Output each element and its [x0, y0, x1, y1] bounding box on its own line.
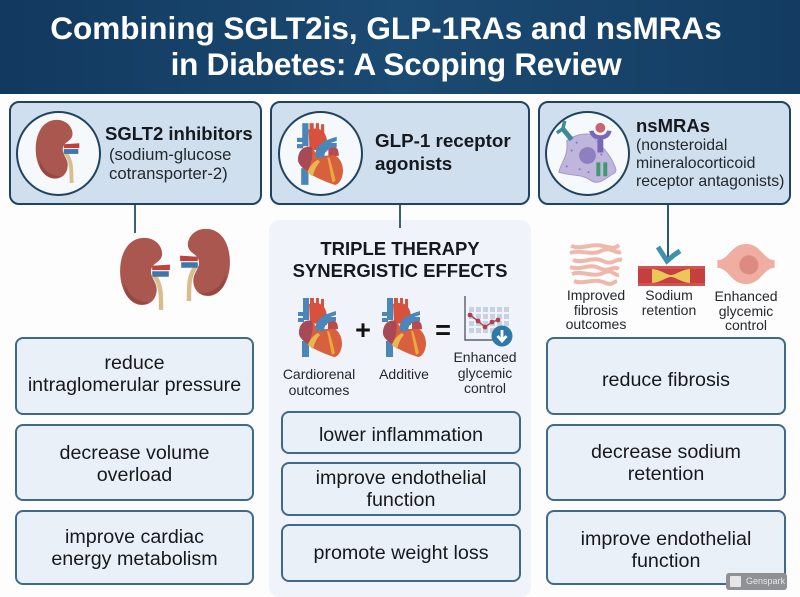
box: improve endothelial function: [546, 510, 786, 585]
icon: cell in circle: [545, 111, 630, 196]
box: decrease volume overload: [15, 424, 254, 501]
title: Combining SGLT2is, GLP-1RAs and nsMRAs: [50, 10, 722, 46]
box: decrease sodium retention: retention: [628, 462, 704, 484]
label: enhanced glycemic control: Enhanced: [714, 288, 778, 304]
label: enhanced glycemic control: control: [464, 380, 506, 396]
equals sign: =: [435, 315, 451, 345]
box: improve endothelial function: improve endothelial: [316, 467, 486, 489]
panel: SGLT2 inhibitors header: [9, 101, 262, 205]
description: nonsteroidal mineralocorticoid receptor antagonists: mineralocorticoid: [636, 155, 755, 172]
label: enhanced glycemic control: glycemic: [458, 364, 512, 380]
icon: heart in circle: [278, 111, 363, 196]
label: sodium retention: [642, 287, 696, 318]
icon: kidney in circle: [16, 111, 101, 196]
heading: GLP-1 receptor agonists: [375, 130, 511, 174]
description: nonsteroidal mineralocorticoid receptor antagonists: (nonsteroidal: [636, 137, 727, 154]
description: nonsteroidal mineralocorticoid receptor antagonists: [636, 137, 784, 190]
watermark: Genspark: [726, 573, 787, 590]
box: improve endothelial function: function: [632, 550, 700, 572]
box: decrease volume overload: overload: [97, 464, 172, 486]
panel: GLP-1 receptor agonists header: [270, 101, 530, 205]
icon: heart additive: [382, 298, 426, 357]
triple therapy heading: [293, 238, 507, 281]
box: decrease sodium retention: decrease sodium: [591, 440, 741, 462]
label: improved fibrosis outcomes: [566, 287, 626, 332]
panel: triple therapy: [269, 220, 531, 597]
box: lower inflammation: lower inflammation: [319, 424, 483, 446]
box: reduce intraglomerular pressure: reduce: [104, 352, 165, 374]
box: improve cardiac energy metabolism: improve cardiac: [65, 526, 204, 548]
label: cardiorenal outcomes: [283, 366, 355, 398]
heading: SGLT2 inhibitors: SGLT2 inhibitors: [105, 123, 253, 144]
box: reduce intraglomerular pressure: [15, 337, 254, 415]
title: [0, 0, 800, 94]
connector: GLP-1 to triple therapy: [399, 205, 401, 228]
box: improve endothelial function: function: [366, 489, 435, 511]
box: promote weight loss: [281, 524, 521, 582]
description: nonsteroidal mineralocorticoid receptor antagonists: receptor antagonists): [636, 173, 784, 190]
connector: SGLT2 to kidneys: [134, 205, 136, 233]
label: improved fibrosis outcomes: Improved: [567, 287, 625, 303]
label: additive: Additive: [379, 366, 429, 382]
icon: heart cardiorenal: [298, 298, 342, 357]
heading: GLP-1 receptor agonists: agonists: [375, 152, 452, 174]
triple therapy heading: TRIPLE THERAPY: [320, 238, 480, 259]
label: enhanced glycemic control: Enhanced: [453, 349, 517, 365]
box: reduce intraglomerular pressure: intraglomerular pressure: [28, 374, 241, 396]
box: improve cardiac energy metabolism: [15, 510, 254, 585]
icon: fibrosis tissue: [569, 243, 622, 286]
label: improved fibrosis outcomes: fibrosis: [574, 302, 618, 318]
label: cardiorenal outcomes: outcomes: [289, 382, 349, 398]
icon: glycemic chart: [464, 296, 512, 346]
icon: right kidney: [180, 228, 230, 301]
triple therapy heading: SYNERGISTIC EFFECTS: [293, 260, 507, 281]
box: reduce fibrosis: [546, 337, 786, 415]
label: enhanced glycemic control: control: [725, 317, 767, 333]
box: reduce fibrosis: reduce fibrosis: [602, 369, 730, 391]
label: sodium retention: Sodium: [645, 287, 693, 303]
box: promote weight loss: promote weight loss: [313, 542, 489, 564]
plus sign: +: [355, 315, 371, 345]
box: decrease volume overload: decrease volume: [60, 442, 209, 464]
box: improve endothelial function: [281, 462, 521, 516]
label: enhanced glycemic control: glycemic: [719, 302, 773, 318]
box: improve cardiac energy metabolism: energy metabolism: [51, 548, 218, 570]
box: lower inflammation: [281, 411, 521, 454]
heading: GLP-1 receptor agonists: GLP-1 receptor: [375, 130, 511, 151]
label: enhanced glycemic control: [453, 349, 517, 396]
description: sodium-glucose cotransporter-2: [109, 145, 231, 182]
heading: nsMRAs: nsMRAs: [636, 115, 710, 136]
description: sodium-glucose cotransporter-2: (sodium-glucose: [109, 145, 231, 164]
panel: nsMRAs header: [538, 101, 791, 205]
label: cardiorenal outcomes: Cardiorenal: [283, 366, 355, 382]
box: improve endothelial function: improve endothelial: [581, 528, 751, 550]
title: in Diabetes: A Scoping Review: [171, 46, 621, 82]
icon: narrowed vessel: [638, 266, 705, 286]
description: sodium-glucose cotransporter-2: cotransporter-2): [109, 164, 228, 182]
label: sodium retention: retention: [642, 302, 696, 318]
icon: left kidney: [120, 238, 170, 310]
icon: vessel cross-section: [717, 244, 775, 284]
label: improved fibrosis outcomes: outcomes: [566, 316, 626, 332]
label: enhanced glycemic control: [714, 288, 778, 333]
watermark: Genspark: Genspark: [746, 576, 785, 586]
box: decrease sodium retention: [546, 424, 786, 501]
connector: nsMRAs arrow: [656, 205, 682, 265]
